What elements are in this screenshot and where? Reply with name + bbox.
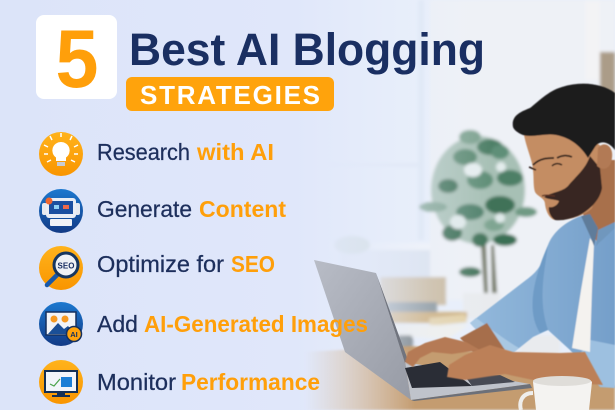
label bbox=[97, 139, 274, 165]
item: monitor performance bbox=[39, 360, 320, 404]
icon: image with AI badge: AI bbox=[70, 330, 78, 339]
title: Best AI Blogging bbox=[129, 24, 485, 75]
item: add AI-generated images bbox=[39, 302, 368, 346]
item: research with AI bbox=[39, 132, 274, 176]
label: Add bbox=[97, 311, 138, 337]
label bbox=[97, 251, 275, 277]
label: Monitor bbox=[97, 369, 176, 395]
small plant bbox=[334, 236, 370, 254]
ear bbox=[597, 144, 612, 169]
icon: monitor bbox=[39, 360, 83, 404]
label bbox=[97, 369, 320, 395]
t-shirt bbox=[572, 238, 594, 352]
brow, eye and mouth bbox=[533, 156, 572, 165]
item: optimize for SEO bbox=[39, 246, 275, 290]
icon: magnifier: SEO bbox=[58, 262, 74, 270]
label bbox=[97, 196, 286, 222]
label: Performance bbox=[181, 369, 320, 395]
person at laptop bbox=[460, 84, 615, 388]
foliage bbox=[419, 130, 537, 277]
subtitle badge: STRATEGIES bbox=[140, 80, 320, 110]
hands bbox=[405, 337, 603, 385]
collar bbox=[581, 214, 598, 246]
trunk bbox=[481, 245, 497, 293]
label: Optimize for bbox=[97, 251, 224, 277]
item: generate content bbox=[39, 189, 286, 233]
icon: robot screen bbox=[39, 189, 83, 233]
label: Research bbox=[97, 139, 190, 165]
coffee cup bbox=[520, 376, 592, 410]
icon: magnifier bbox=[39, 246, 83, 290]
label: SEO bbox=[231, 251, 275, 277]
face bbox=[524, 132, 600, 220]
laptop bbox=[314, 260, 532, 401]
label: Generate bbox=[97, 196, 192, 222]
beard bbox=[544, 156, 602, 220]
neck bbox=[580, 160, 615, 242]
label: Content bbox=[199, 196, 286, 222]
pot bbox=[463, 293, 500, 319]
number badge bbox=[36, 12, 117, 105]
cabinet bbox=[380, 277, 446, 305]
label: with AI bbox=[196, 139, 274, 165]
icon: light bulb bbox=[39, 132, 83, 176]
hair bbox=[513, 84, 615, 158]
sleeve shading bbox=[532, 245, 548, 333]
desk bbox=[305, 346, 615, 410]
icon: image with AI badge bbox=[39, 302, 83, 346]
left forearm bbox=[460, 323, 505, 352]
number badge: 5 bbox=[56, 12, 98, 105]
shirt bbox=[470, 216, 615, 388]
label: AI-Generated Images bbox=[144, 311, 368, 337]
desk items bbox=[387, 302, 437, 312]
